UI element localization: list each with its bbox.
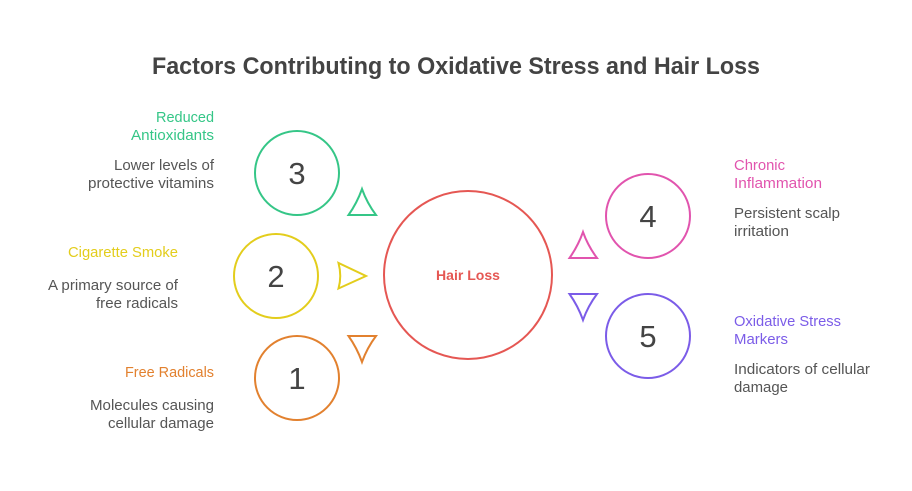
node 3: Reduced Antioxidants: Reduced: [156, 109, 214, 126]
node 4: Chronic Inflammation: Inflammation: [734, 175, 822, 192]
node 3: Reduced Antioxidants: Lower levels of: [114, 157, 215, 174]
node 2: Cigarette Smoke: [48, 234, 318, 318]
node 4: Chronic Inflammation: 4: [639, 199, 657, 234]
arrow: purple triangle: [570, 294, 597, 320]
central circle: Hair Loss: Hair Loss: [436, 267, 500, 283]
node 2: Cigarette Smoke: 2: [267, 259, 285, 294]
node 4: Chronic Inflammation: Persistent scalp: [734, 205, 840, 222]
node 1: Free Radicals: 1: [288, 361, 306, 396]
arrow: orange triangle: [348, 336, 376, 362]
title: Factors Contributing to Oxidative Stress and Hair Loss: [152, 53, 760, 80]
arrow: yellow triangle: [338, 263, 366, 288]
node 5: Oxidative Stress Markers: 5: [639, 319, 657, 354]
node 4: Chronic Inflammation: Chronic: [734, 157, 785, 174]
node 4: Chronic Inflammation: irritation: [734, 223, 789, 240]
node 5: Oxidative Stress Markers: Markers: [734, 331, 788, 348]
node 5: Oxidative Stress Markers: Indicators of cellular: [734, 361, 870, 378]
arrow: pink triangle: [570, 232, 597, 258]
central circle: Hair Loss: [384, 191, 552, 359]
arrow: green triangle: [348, 189, 376, 215]
node 1: Free Radicals: Molecules causing: [90, 397, 214, 414]
node 5: Oxidative Stress Markers: Oxidative Stress: [734, 313, 841, 330]
node 5: Oxidative Stress Markers: damage: [734, 379, 788, 396]
node 1: Free Radicals: Free Radicals: [125, 364, 214, 381]
node 3: Reduced Antioxidants: 3: [288, 156, 306, 191]
node 1: Free Radicals: [90, 336, 339, 432]
node 1: Free Radicals: cellular damage: [108, 415, 214, 432]
node 2: Cigarette Smoke: A primary source of: [48, 277, 179, 294]
node 3: Reduced Antioxidants: Antioxidants: [131, 127, 214, 144]
node 4: Chronic Inflammation: [606, 157, 840, 258]
node 2: Cigarette Smoke: Cigarette Smoke: [68, 244, 178, 261]
node 2: Cigarette Smoke: free radicals: [96, 295, 178, 312]
node 3: Reduced Antioxidants: protective vitamins: [88, 175, 214, 192]
node 5: Oxidative Stress Markers: [606, 294, 870, 396]
node 3: Reduced Antioxidants: [88, 109, 339, 215]
